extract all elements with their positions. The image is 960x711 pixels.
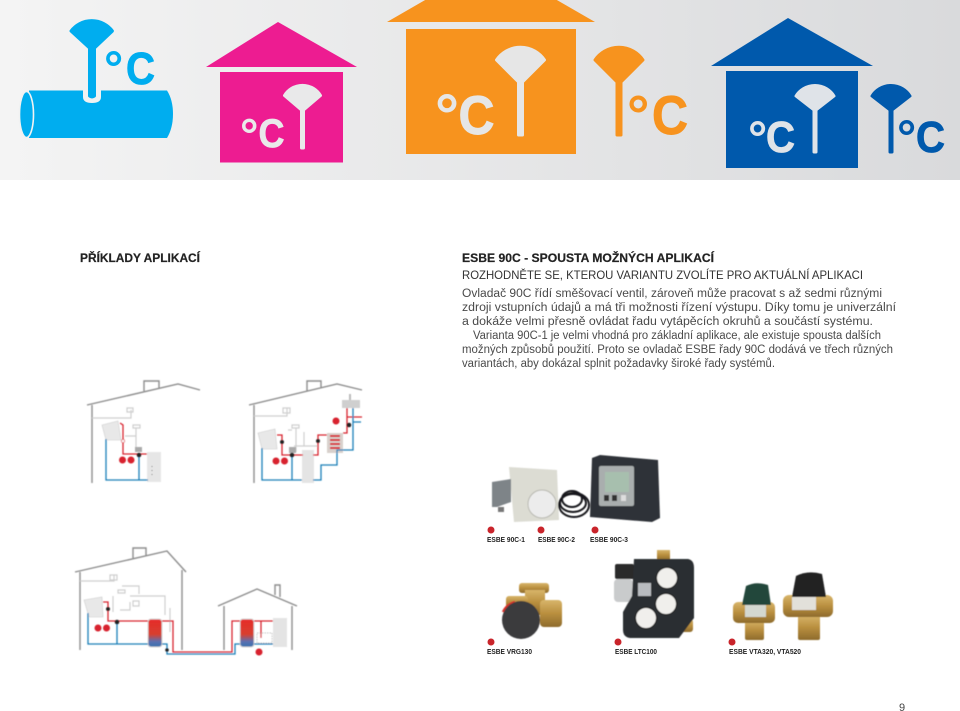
icon: blue house sensor bbox=[711, 18, 873, 168]
icon: pipe sensor: ° bbox=[104, 43, 123, 96]
heading: main: ESBE 90C - SPOUSTA MOŽNÝCH APLIKACÍ bbox=[462, 250, 715, 265]
icon: blue house sensor: ° bbox=[748, 113, 767, 166]
icon: blue sensor bbox=[872, 85, 945, 165]
marker: 90C-2 bbox=[538, 526, 544, 534]
cable coil bbox=[559, 491, 589, 517]
product photo: VTA valves bbox=[733, 572, 833, 640]
paragraph: Varianta 90C-1 je velmi vhodná pro základní aplikace, ale existuje spousta dalších bbox=[473, 330, 881, 342]
label: VRG130: ESBE VRG130 bbox=[487, 649, 532, 656]
sensor bbox=[492, 479, 511, 512]
product photo: LTC100 bbox=[614, 550, 694, 638]
icon: orange house sensor bbox=[387, 0, 595, 154]
icon: blue house sensor: C bbox=[766, 113, 795, 162]
icon: pink house sensor: ° bbox=[240, 109, 258, 161]
marker: 90C-3 bbox=[592, 526, 598, 534]
icon: blue sensor: ° bbox=[897, 112, 916, 165]
marker: 90C-1 bbox=[488, 526, 494, 534]
marker: LTC100 bbox=[614, 638, 622, 646]
icon: pink house sensor bbox=[206, 22, 357, 162]
icon: orange house sensor: ° bbox=[435, 82, 459, 149]
icon: pipe sensor: C bbox=[126, 43, 155, 94]
marker: VRG130 bbox=[488, 638, 494, 646]
controller box bbox=[590, 455, 660, 522]
product photo: 90C controllers bbox=[492, 455, 660, 522]
diagram: house with radiator and boiler bbox=[87, 381, 200, 483]
product photo: VRG130 valve bbox=[502, 583, 562, 639]
heading: examples: PŘÍKLADY APLIKACÍ bbox=[80, 250, 201, 265]
diagram: house with radiator, boiler and water heater bbox=[249, 381, 362, 483]
thermostat panel bbox=[509, 467, 559, 522]
paragraph: variantách, aby dokázal splnit požadavky široké řady systémů. bbox=[462, 358, 775, 370]
icon: orange house sensor: C bbox=[458, 84, 494, 146]
label: 90C-1: ESBE 90C-1 bbox=[487, 537, 525, 544]
subheading: ROZHODNĚTE SE, KTEROU VARIANTU ZVOLÍTE PRO AKTUÁLNÍ APLIKACI bbox=[462, 267, 863, 282]
paragraph bbox=[462, 288, 897, 370]
text block: description bbox=[462, 250, 897, 370]
header band bbox=[0, 0, 960, 180]
icon: orange sensor bbox=[595, 47, 688, 146]
icon: pipe sensor bbox=[20, 21, 173, 138]
paragraph: možných způsobů použití. Proto se ovladač ESBE řady 90C dodává ve třech různých bbox=[462, 344, 893, 356]
icon: blue sensor: C bbox=[916, 113, 945, 162]
marker: VTA bbox=[728, 638, 736, 646]
paragraph: zdroji vstupních údajů a má tři možnosti řízení výstupu. Díky tomu je univerzální bbox=[462, 302, 897, 314]
icon: pink house sensor: C bbox=[258, 112, 284, 156]
label: 90C-3: ESBE 90C-3 bbox=[590, 537, 628, 544]
label: LTC100: ESBE LTC100 bbox=[615, 649, 657, 656]
icon: orange sensor: ° bbox=[627, 83, 649, 146]
label: VTA: ESBE VTA320, VTA520 bbox=[729, 649, 801, 656]
diagram: two buildings with storage tanks bbox=[75, 548, 297, 656]
paragraph: Ovladač 90C řídí směšovací ventil, zároveň může pracovat s až sedmi různými bbox=[462, 288, 882, 300]
paragraph: a dokáže velmi přesně ovládat řadu vytápěcích okruhů a součástí systému. bbox=[462, 316, 873, 328]
icon: orange sensor: C bbox=[652, 84, 688, 146]
label: 90C-2: ESBE 90C-2 bbox=[538, 537, 575, 544]
